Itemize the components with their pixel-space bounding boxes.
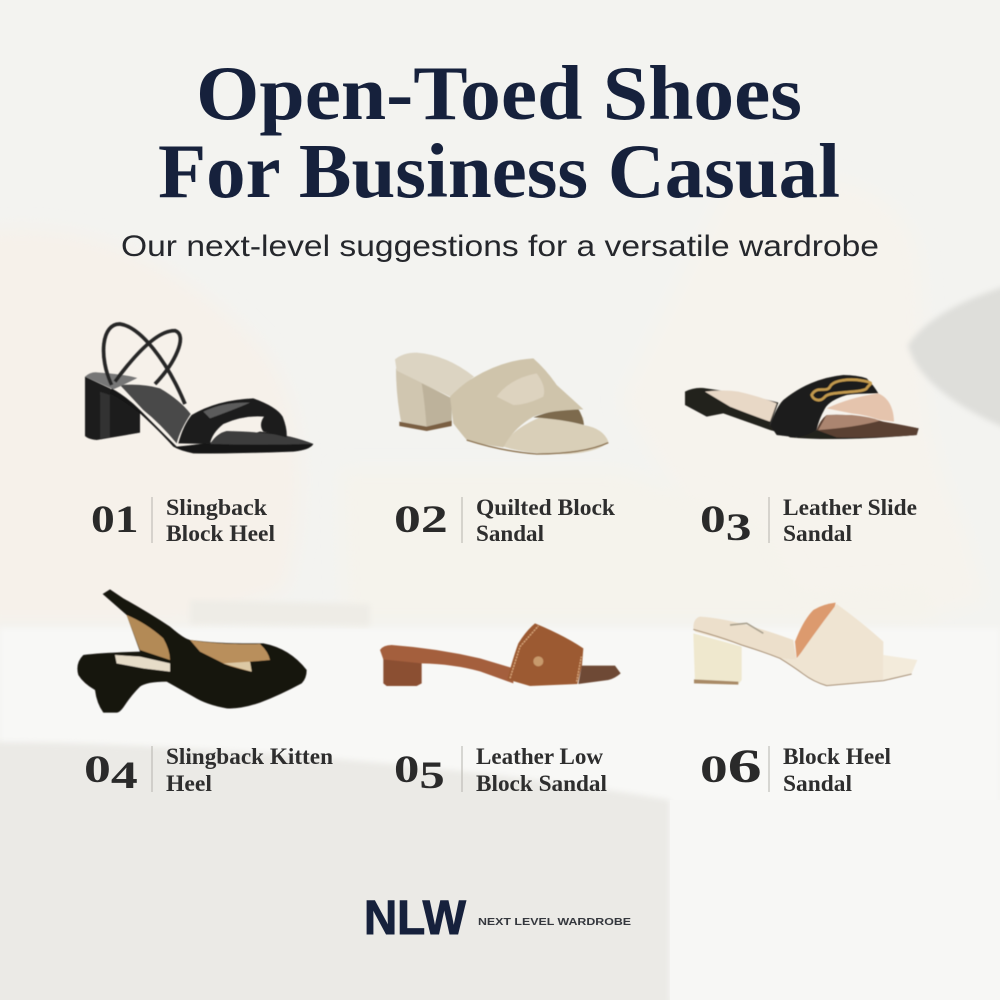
shoe 03: leather slide sandal [685, 375, 919, 439]
label 03: 0 [700, 497, 726, 541]
label 01: 01 [91, 498, 139, 541]
label 03: Sandal [783, 521, 852, 546]
label 03: 3 [726, 505, 751, 549]
label 05 [394, 744, 607, 797]
label 02 [394, 495, 615, 546]
footer logo: NEXT LEVEL WARDROBE [478, 916, 631, 928]
shoe 01: slingback block heel [85, 324, 313, 453]
label 04: 4 [111, 754, 138, 797]
label 03 [700, 495, 917, 549]
label 02: 02 [394, 498, 448, 541]
label 06: Sandal [783, 771, 852, 796]
label 05: Leather Low [476, 744, 603, 769]
subtitle: Our next-level suggestions for a versatile wardrobe [121, 230, 879, 263]
title: Open-Toed Shoes [196, 50, 802, 136]
label 04 [84, 744, 333, 797]
title [158, 50, 840, 214]
label 04: Heel [166, 771, 212, 796]
label 04: Slingback Kitten [166, 744, 333, 769]
shoe 02: quilted block sandal [395, 353, 608, 454]
label 02: Quilted Block [476, 495, 615, 520]
label 06 [700, 739, 891, 796]
label 04: 0 [84, 748, 111, 791]
label 05: Block Sandal [476, 771, 607, 796]
label 01 [91, 495, 275, 546]
label 03: Leather Slide [783, 495, 917, 520]
label 01: Block Heel [166, 521, 275, 546]
shoe 04: slingback kitten heel [77, 589, 307, 713]
shoe 05: leather low block sandal [380, 623, 621, 686]
shoe 06: block heel sandal [693, 603, 917, 686]
label 05: 0 [394, 748, 419, 791]
footer logo [364, 892, 631, 945]
footer logo: NLW [364, 892, 467, 945]
label 02: Sandal [476, 521, 544, 546]
label 06: 06 [700, 739, 762, 793]
label 06: Block Heel [783, 744, 891, 769]
label 05: 5 [419, 754, 445, 797]
label 01: Slingback [166, 495, 267, 520]
title: For Business Casual [158, 128, 840, 214]
